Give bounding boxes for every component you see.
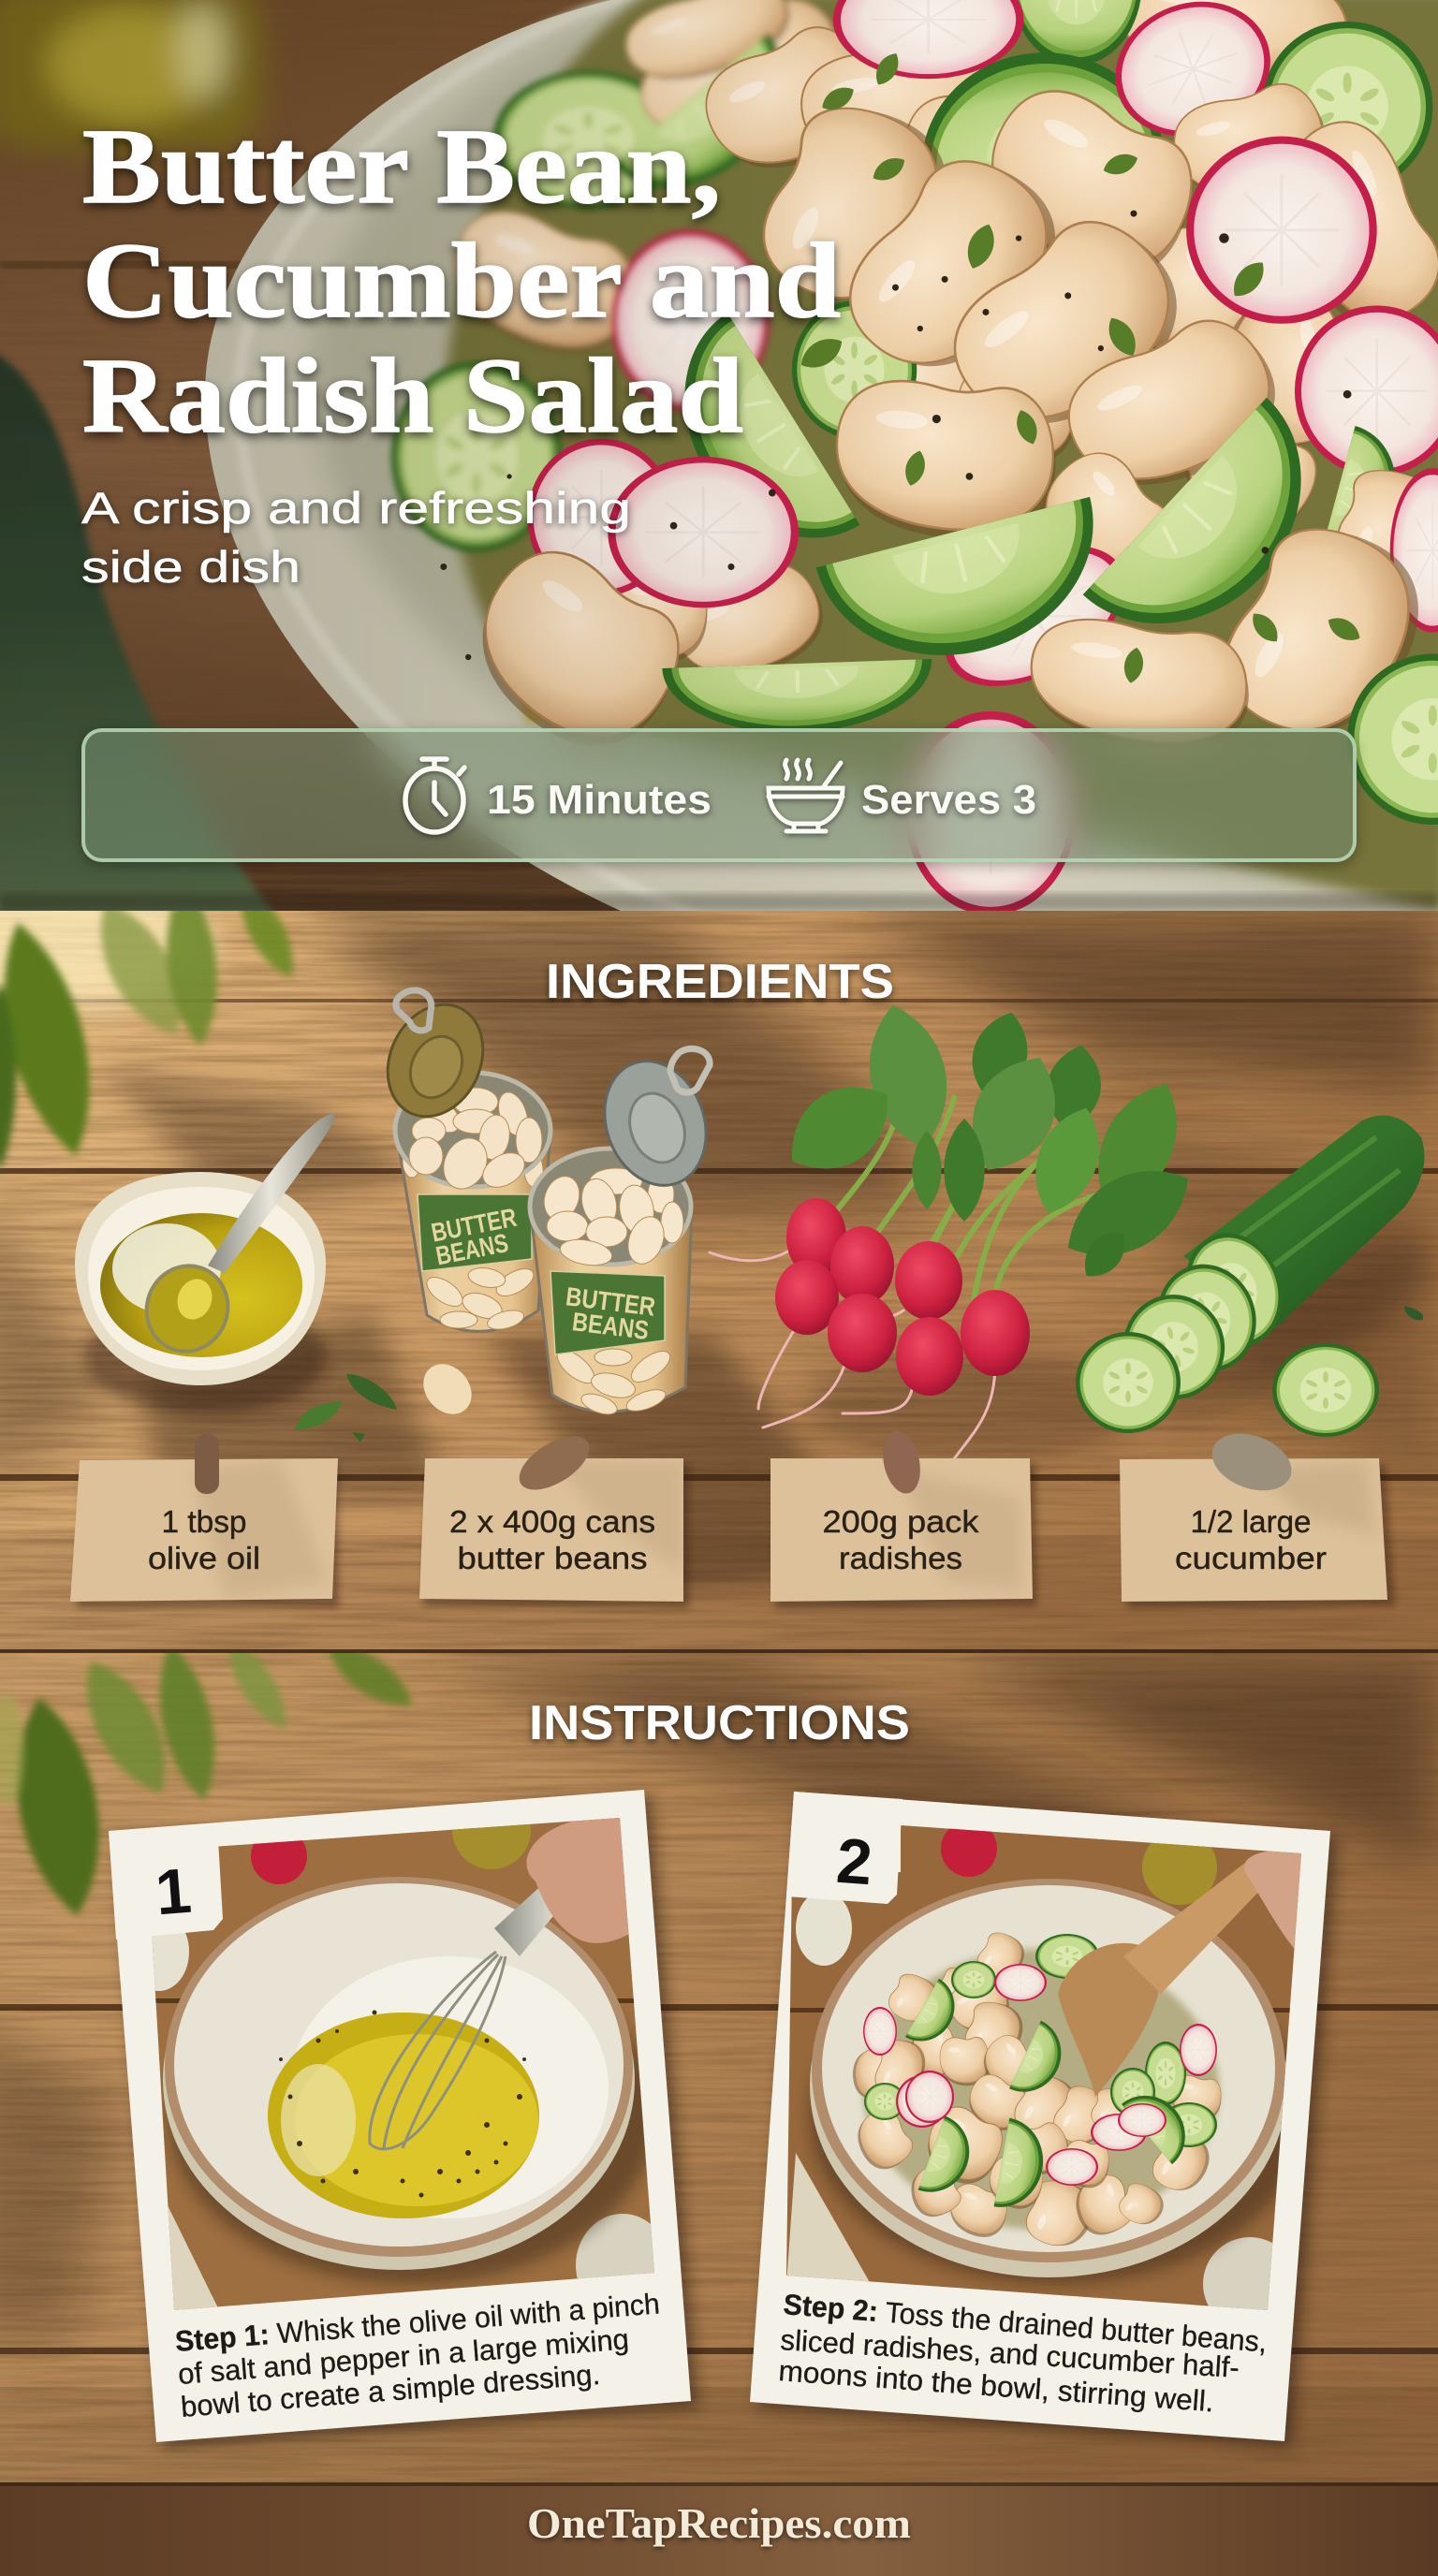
info bar: glass panel — [81, 728, 1357, 862]
step number: 1 — [153, 1855, 194, 1928]
wooden table — [0, 0, 1438, 911]
herbs and cracked pepper — [440, 49, 1364, 685]
hero photo: salad in a bowl on a wooden table — [0, 0, 1438, 911]
step text — [174, 2287, 661, 2423]
ingredient tag: radishes: 200g pack — [822, 1504, 979, 1539]
step number: 2 — [834, 1825, 874, 1898]
lower sections — [0, 911, 1438, 2576]
number tab — [786, 1792, 902, 1904]
illustration: can of butter beans, front — [530, 1149, 692, 1418]
icon: stopwatch — [405, 759, 464, 832]
out of focus leaves — [0, 911, 298, 1168]
salad — [391, 0, 1438, 915]
footer — [0, 2482, 1438, 2576]
panel: hero — [0, 0, 1438, 911]
number tab — [109, 1823, 223, 1939]
ingredient tag: cucumber: 1/2 large — [1191, 1504, 1311, 1539]
step card 2 — [750, 1792, 1339, 2448]
subtitle — [81, 483, 631, 592]
heading: INGREDIENTS — [546, 955, 894, 1009]
photo: tossing the salad — [777, 1807, 1339, 2331]
ingredient tag: cucumber — [1120, 1424, 1395, 1608]
illustration: can of butter beans, back — [395, 1073, 550, 1333]
step card 1 — [109, 1778, 698, 2449]
ingredient tag: olive oil: 1 tbsp — [161, 1504, 247, 1539]
heading: INSTRUCTIONS — [529, 1696, 910, 1750]
wood table background — [0, 877, 1438, 1653]
subtitle: side dish — [81, 542, 301, 592]
wood table background — [0, 1632, 1438, 2482]
ingredient tag: butter beans: 2 x 400g cans — [449, 1504, 655, 1539]
title — [82, 107, 841, 455]
ingredient tag: butter beans — [419, 1426, 689, 1608]
step text — [777, 2288, 1269, 2418]
step text: moons into the bowl, stirring well. — [777, 2354, 1215, 2418]
olive oil jar, out of focus — [0, 0, 262, 150]
ingredient tag: radishes: radishes — [839, 1541, 962, 1575]
ingredient tag: olive oil: olive oil — [148, 1541, 260, 1575]
title: Butter Bean, — [82, 107, 721, 226]
green linen napkin — [0, 351, 281, 922]
step text: Step 2: Toss the drained butter beans, — [782, 2288, 1269, 2359]
ingredient tag: butter beans: butter beans — [457, 1541, 648, 1575]
loose bean and basil leaves — [295, 1364, 472, 1442]
step text: sliced radishes, and cucumber half- — [780, 2323, 1240, 2384]
soft veil behind the title — [0, 0, 936, 911]
hero text and icons — [81, 107, 1039, 839]
illustration: cucumber with slices — [1076, 1115, 1438, 1449]
ingredient tag: olive oil — [70, 1434, 339, 1608]
out of focus leaves — [0, 1632, 422, 1922]
illustration: open gold lid and pull ring — [386, 987, 485, 1118]
illustration: olive oil bowl with spoon — [75, 1114, 335, 1413]
title: Cucumber and — [82, 221, 841, 340]
ingredient tag: cucumber: cucumber — [1175, 1541, 1327, 1575]
bowl — [205, 0, 1438, 922]
illustration: open silver lid and pull ring — [603, 1045, 713, 1187]
illustration: bunch of radishes — [710, 997, 1206, 1460]
photo: whisking dressing — [112, 1778, 674, 2340]
title: Radish Salad — [82, 336, 743, 455]
subtitle: A crisp and refreshing — [81, 483, 631, 533]
footer: OneTapRecipes.com — [527, 2499, 911, 2547]
panel: ingredients — [0, 877, 1438, 1653]
step text: Step 1: Whisk the olive oil with a pinch — [174, 2287, 661, 2358]
ingredient tag: radishes — [770, 1427, 1037, 1608]
step text: of salt and pepper in a large mixing — [177, 2322, 630, 2391]
illustration: can of butter beans, front: BEANS — [571, 1307, 651, 1345]
illustration: can of butter beans, back: BUTTER — [429, 1203, 519, 1248]
text: time: 15 Minutes — [487, 777, 712, 823]
panel: instructions — [0, 1632, 1438, 2482]
icon: bowl with steam and spoon — [769, 760, 843, 831]
text: servings: Serves 3 — [861, 777, 1036, 823]
illustration: can of butter beans, front: BUTTER — [565, 1281, 657, 1322]
step text: bowl to create a simple dressing. — [180, 2358, 601, 2423]
illustration: can of butter beans, back: BEANS — [433, 1228, 510, 1270]
